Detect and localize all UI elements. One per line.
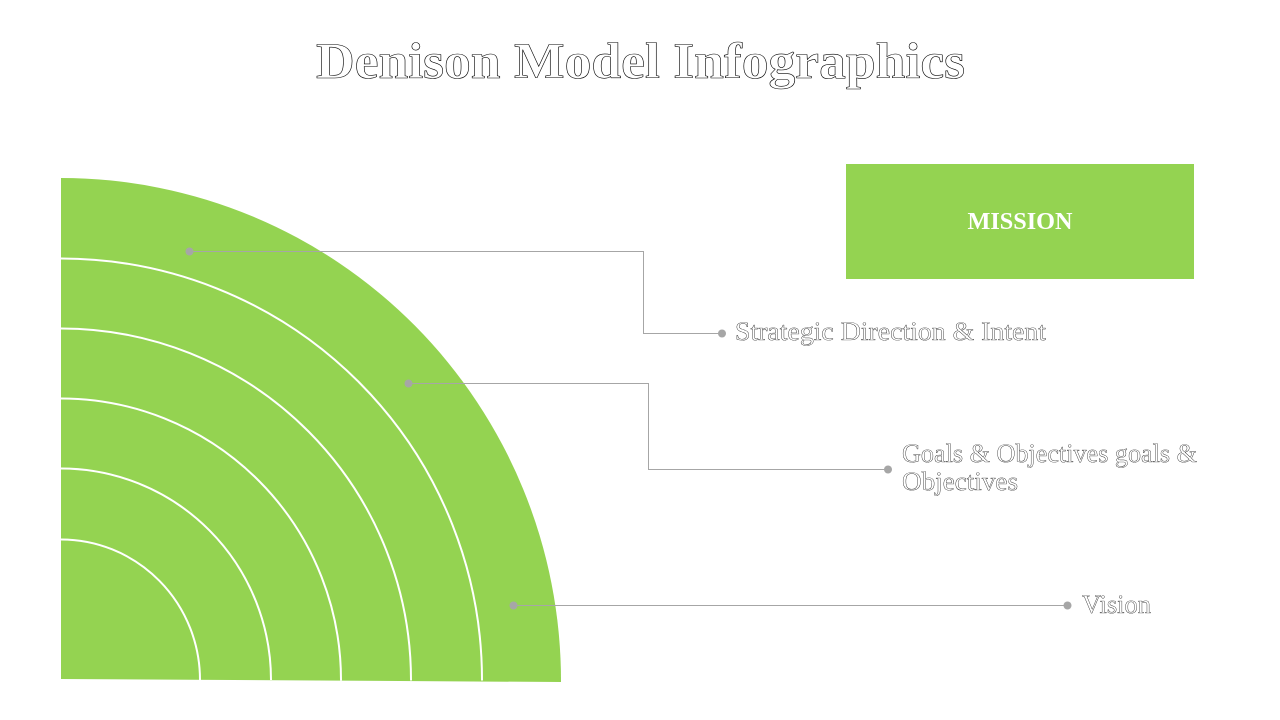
connector: strategic direction: [186, 248, 726, 338]
connector: vision: [510, 602, 1072, 610]
label: goals and objectives: Goals & Objectives goals &: [902, 439, 1197, 468]
panel: mission: [846, 164, 1194, 279]
ring arcs: [61, 258, 482, 680]
chart: concentric quarter circle: [61, 178, 561, 682]
title: Denison Model Infographics: [316, 34, 965, 90]
label: goals and objectives: [902, 439, 1197, 496]
mission label: MISSION: [968, 209, 1073, 235]
label: goals and objectives: Objectives: [902, 467, 1018, 496]
label: strategic direction and intent: Strategic Direction & Intent: [735, 317, 1047, 346]
outer green quarter disc: [61, 178, 561, 682]
connector: goals and objectives: [404, 380, 892, 474]
label: vision: Vision: [1082, 590, 1151, 619]
